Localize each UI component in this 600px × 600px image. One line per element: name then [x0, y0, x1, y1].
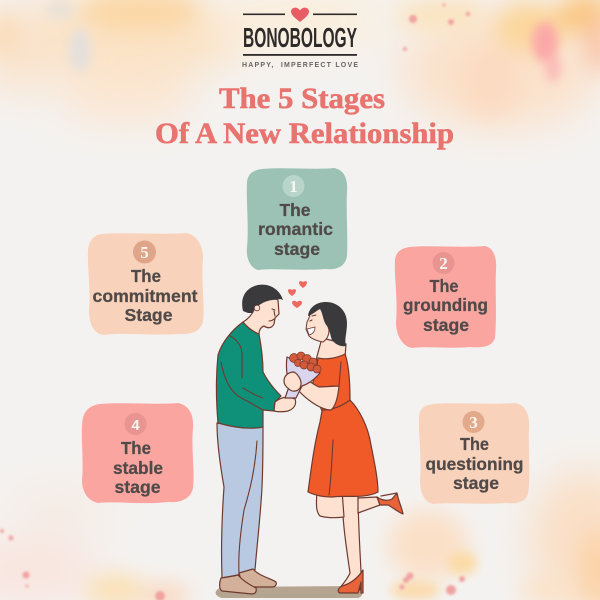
text: The commitment Stage: Stage — [124, 305, 173, 325]
text: The grounding stage: The — [430, 276, 459, 296]
illustration: couple with bouquet — [216, 281, 403, 598]
panel: stage 4 stable — [82, 403, 194, 503]
title: The 5 Stages — [219, 82, 385, 115]
panel: stage 2 grounding: 2 — [439, 254, 448, 273]
title: Of A New Relationship — [155, 117, 454, 150]
woman face — [306, 307, 329, 342]
badge: 5 — [133, 240, 156, 264]
badge: 2 — [432, 252, 454, 274]
text: The questioning stage: questioning — [426, 454, 524, 474]
text: The romantic stage: The — [280, 200, 311, 220]
man — [216, 285, 296, 594]
text: The questioning stage: The — [460, 434, 489, 454]
panel: stage 2 grounding — [395, 246, 496, 348]
text: The stable stage: stable — [113, 458, 163, 478]
woman bent leg — [316, 490, 344, 518]
badge: 3 — [462, 411, 484, 433]
text: The questioning stage: stage — [453, 473, 499, 493]
badge: 4 — [124, 413, 146, 435]
text: The stable stage: stage — [114, 477, 161, 497]
man sweater — [216, 322, 281, 428]
panel: stage 1 romantic — [247, 168, 347, 270]
panel: stage 3 questioning: 3 — [469, 413, 478, 432]
ground shadow — [216, 586, 362, 598]
text: The questioning stage — [426, 434, 524, 493]
text: The romantic stage: romantic — [258, 219, 333, 239]
woman hair — [308, 302, 347, 346]
logo rule lines — [243, 14, 357, 56]
man back shoe — [239, 569, 276, 587]
text: The grounding stage — [403, 276, 488, 335]
man neck and face — [243, 297, 279, 334]
logo tagline: HAPPY, IMPERFECT LOVE — [242, 62, 358, 69]
woman hand — [284, 372, 301, 391]
text: The commitment Stage: The — [131, 266, 161, 286]
man hand — [274, 397, 296, 412]
text: The romantic stage: stage — [274, 239, 320, 259]
woman shoe standing — [338, 570, 363, 593]
text: The commitment Stage: commitment — [92, 286, 198, 306]
woman neck and chest — [316, 338, 346, 360]
man trousers — [217, 423, 263, 578]
badge: 1 — [282, 175, 304, 197]
text: The stable stage — [113, 438, 163, 497]
woman arm — [290, 372, 339, 410]
man ear — [254, 305, 260, 311]
icon: logo heart — [291, 8, 309, 22]
text: The stable stage: The — [121, 438, 151, 458]
text: The commitment Stage — [92, 266, 198, 325]
title — [155, 82, 454, 150]
man hair — [242, 285, 283, 313]
woman dress — [308, 354, 378, 497]
text: The grounding stage: stage — [423, 315, 469, 335]
woman standing leg — [339, 490, 361, 590]
panel: stage 4 stable: 4 — [131, 417, 140, 434]
panel: stage 1 romantic: 1 — [289, 177, 298, 196]
panel: stage 5 commitment: 5 — [140, 243, 149, 262]
man front shoe — [220, 575, 256, 594]
text: The romantic stage — [258, 200, 333, 259]
icon: floating hearts — [288, 281, 307, 308]
logo wordmark: BONOBOLOGY — [243, 22, 357, 53]
panel: stage 5 commitment — [88, 233, 204, 335]
logo: Bonobology — [242, 8, 358, 69]
woman shoe raised — [377, 493, 403, 514]
panel: stage 3 questioning — [419, 403, 529, 504]
bouquet — [284, 352, 321, 398]
text: The grounding stage: grounding — [403, 295, 488, 315]
woman — [290, 302, 403, 593]
